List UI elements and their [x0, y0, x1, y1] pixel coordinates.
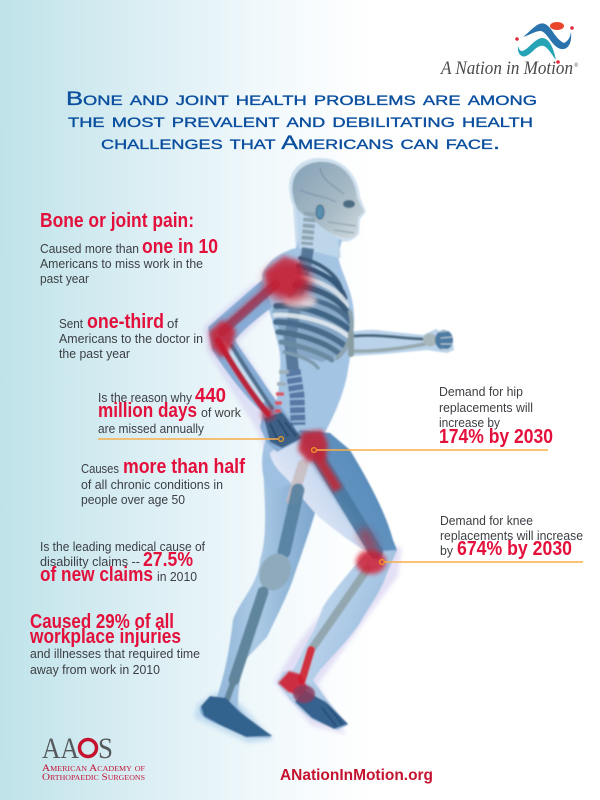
text block: one-third: the past year [59, 346, 131, 361]
logo: AAOS [42, 732, 145, 783]
ankle glow [278, 671, 308, 696]
icon: motion waves [515, 22, 574, 64]
text block: one-third: Sent [59, 316, 83, 331]
text block: knee replacements: replacements will increase [440, 528, 583, 543]
shoulder glow [264, 262, 312, 302]
front arm flesh [350, 329, 454, 356]
text block: hip replacements: Demand for hip [439, 384, 523, 399]
text block: knee replacements: by [440, 543, 453, 558]
text block: one in 10 [40, 236, 218, 286]
red pain glows [209, 256, 386, 703]
icon: red O [80, 740, 96, 756]
AAOS name: Orthopaedic Surgeons [42, 772, 145, 783]
letter S: S [98, 732, 113, 765]
text block: hip replacements: replacements will [439, 400, 533, 415]
text block: one-third: Americans to the doctor in [59, 331, 203, 346]
text block: 29 percent: and illnesses that required time [30, 646, 200, 661]
torso flesh [262, 205, 354, 490]
rear arm flesh [208, 280, 300, 452]
neck flesh [296, 207, 340, 258]
knee femur red [362, 530, 374, 552]
title: Bone and joint health problems are among [66, 88, 537, 110]
callout line: hand [98, 437, 283, 441]
front leg flesh: calf [277, 550, 397, 730]
text block: 27.5 percent [40, 539, 205, 586]
text block: one-third: one-third [87, 311, 164, 333]
text block: 27.5 percent: in 2010 [157, 569, 197, 584]
text block: hip replacements: 174% by 2030 [439, 426, 553, 448]
text block: 440 million days: million days [98, 400, 197, 422]
elbow glow [209, 320, 236, 358]
skull detail [300, 168, 356, 233]
hip lower femur red [318, 458, 338, 490]
text block: 29 percent [29, 611, 200, 677]
front arm bones [351, 330, 453, 354]
forearm pale inner bar [225, 344, 262, 400]
text block: 29 percent: away from work in 2010 [30, 662, 160, 677]
text block: 27.5 percent: disability claims -- [40, 554, 140, 569]
text block: one-third [59, 311, 203, 361]
text block: more than half: of all chronic conditions in [81, 477, 223, 492]
callout line: hip [312, 448, 548, 452]
title: challenges that Americans can face. [101, 132, 500, 154]
front leg bones [295, 460, 376, 729]
registered mark: ® [574, 62, 579, 69]
ribcage [272, 255, 353, 368]
text block: more than half [81, 456, 245, 507]
text block: 440 million days: Is the reason why [98, 390, 192, 405]
text block: one in 10: past year [40, 271, 90, 286]
text block: 27.5 percent: Is the leading medical cause of [40, 539, 205, 554]
ribcage backing [272, 255, 353, 362]
text block: 440 million days [98, 385, 241, 436]
text block: 29 percent: Caused 29% of all [30, 611, 174, 633]
front leg flesh: thigh [270, 430, 397, 580]
hand [264, 412, 302, 448]
text block: knee replacements: Demand for knee [440, 513, 533, 528]
text block: 440 million days: are missed annually [98, 421, 204, 436]
AAOS name: American Academy of [42, 763, 145, 774]
title [66, 88, 537, 154]
text block: knee replacements [440, 513, 583, 560]
text block: more than half: more than half [123, 456, 245, 478]
rear arm bones [218, 284, 302, 448]
text block: 440 million days: of work [201, 405, 241, 420]
text block: one in 10: Caused more than [40, 241, 139, 256]
title: the most prevalent and debilitating health [68, 110, 533, 132]
shoulder highlight [283, 294, 317, 308]
text block: 29 percent: workplace injuries [29, 626, 181, 648]
text block: knee replacements: 674% by 2030 [457, 538, 572, 560]
AAOS letters: AA [42, 732, 79, 765]
heading: bone or joint pain: Bone or joint pain: [40, 210, 194, 232]
text block: 27.5 percent: of new claims [40, 564, 153, 586]
text block: more than half: Causes [81, 461, 119, 476]
text block: one in 10: Americans to miss work in the [40, 256, 203, 271]
scapula glow [264, 256, 304, 296]
AAOS name [42, 763, 145, 783]
head flesh [289, 158, 366, 258]
skull [292, 162, 364, 238]
text block: more than half: people over age 50 [81, 492, 185, 507]
knee glow [356, 550, 386, 574]
text block: one-third: of [167, 316, 178, 331]
text block: hip replacements [439, 384, 553, 448]
spine [275, 212, 310, 425]
text block: one in 10: one in 10 [142, 236, 218, 258]
callout line: knee [380, 560, 583, 564]
hip glow [298, 430, 328, 462]
text block: 440 million days: 440 [195, 385, 226, 407]
website url: ANationInMotion.org [280, 767, 433, 784]
upper arm red [226, 286, 272, 326]
rear leg bones [201, 465, 303, 737]
text block: hip replacements: increase by [439, 415, 500, 430]
rear leg flesh [200, 450, 315, 738]
text block: 27.5 percent: 27.5% [143, 549, 193, 571]
body halo [194, 282, 402, 743]
wrist glow [261, 407, 275, 421]
illustration: translucent running body [194, 158, 454, 743]
logo: A Nation in Motion [439, 22, 579, 79]
logo wordmark: A Nation in Motion [439, 58, 573, 79]
